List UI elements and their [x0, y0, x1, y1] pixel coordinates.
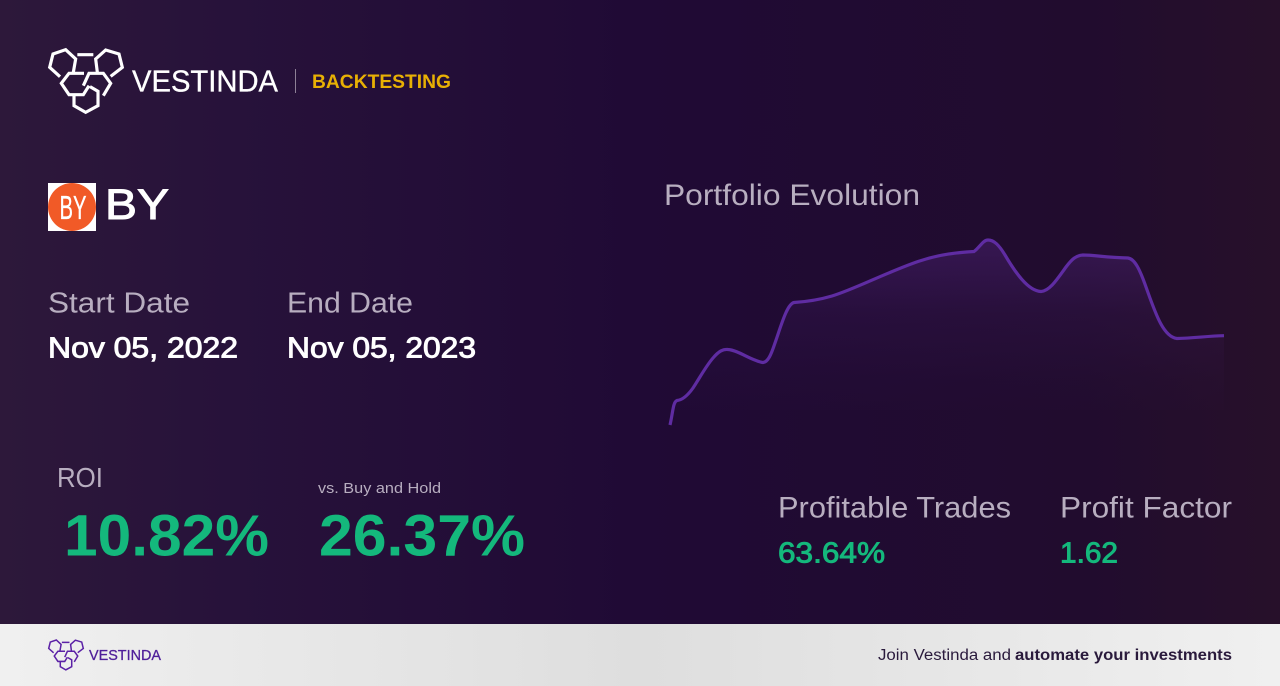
footer logo: [49, 640, 161, 670]
icon: Vestinda hexagon logo: [48, 48, 124, 114]
start date: Start Date: [48, 288, 190, 320]
profitable trades: [778, 492, 1011, 570]
start date: [48, 288, 238, 365]
ticker symbol: BY: [105, 181, 169, 229]
end date: Nov 05, 2023: [287, 333, 476, 365]
ROI: 10.82%: [64, 504, 269, 569]
start date: Nov 05, 2022: [48, 333, 238, 365]
ticker: [48, 181, 169, 231]
call to action: automate your investments: [1015, 647, 1232, 664]
profitable trades: 63.64%: [778, 538, 885, 570]
call to action: Join Vestinda and: [878, 647, 1011, 664]
end date: End Date: [287, 288, 413, 320]
profit factor: [1060, 492, 1232, 570]
end date: [287, 288, 476, 365]
icon: BY logo: BY: [60, 189, 86, 226]
profit factor: 1.62: [1060, 538, 1118, 570]
icon: footer hexagon logo: [48, 639, 84, 671]
vs buy and hold: vs. Buy and Hold: [318, 480, 441, 497]
vs buy and hold: 26.37%: [319, 504, 525, 569]
header logo: [50, 50, 278, 112]
vs buy and hold: [318, 480, 525, 569]
divider: [295, 69, 296, 93]
chart heading: Portfolio Evolution: [664, 179, 920, 212]
ROI: [57, 462, 269, 569]
ROI: ROI: [57, 462, 103, 493]
footer wordmark: VESTINDA: [89, 647, 161, 664]
heading: backtesting: BACKTESTING: [312, 72, 451, 93]
profit factor: Profit Factor: [1060, 492, 1232, 525]
line chart: portfolio evolution: [670, 240, 1224, 425]
logo wordmark: VESTINDA: [132, 64, 278, 98]
footer: [0, 624, 1280, 686]
profitable trades: Profitable Trades: [778, 492, 1011, 525]
call to action: [878, 647, 1232, 664]
